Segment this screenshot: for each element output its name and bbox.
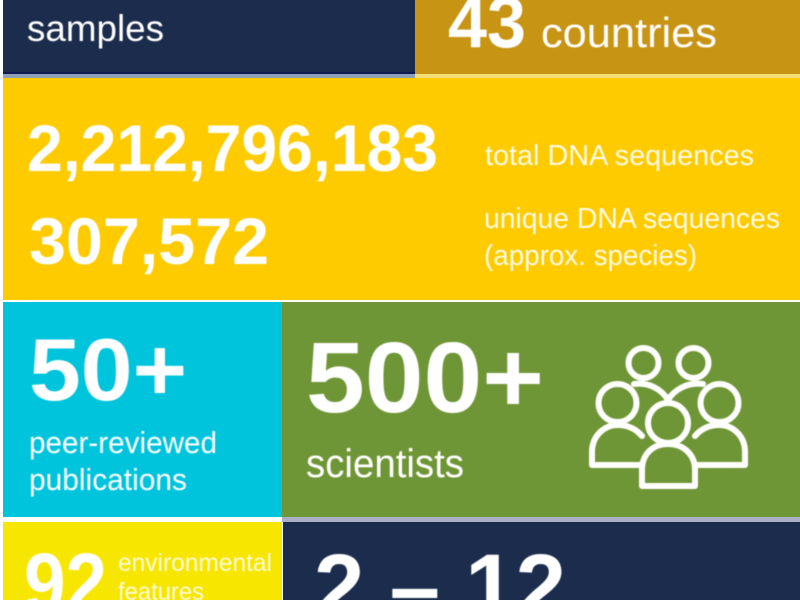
panel: publications <box>3 302 282 517</box>
samples label: samples <box>27 8 164 49</box>
unique sequences label: unique DNA sequences <box>484 203 780 235</box>
publications label: publications <box>29 462 187 497</box>
publications label: peer-reviewed <box>29 425 217 460</box>
total sequences label: total DNA sequences <box>485 140 754 172</box>
panel: range <box>283 522 800 600</box>
icon: group of people <box>592 348 745 486</box>
total sequences number: 2,212,796,183 <box>27 111 438 185</box>
panel: DNA sequences <box>3 78 800 300</box>
panel: scientists <box>282 302 800 517</box>
countries label: countries <box>541 9 717 56</box>
unique sequences number: 307,572 <box>29 204 269 278</box>
panel: samples <box>3 0 415 74</box>
panel: countries <box>415 0 800 74</box>
scientists label: scientists <box>306 442 464 486</box>
scientists number: 500+ <box>306 322 544 434</box>
panel: environmental features <box>3 522 282 600</box>
unique sequences label: (approx. species) <box>484 240 697 272</box>
features label: environmental <box>118 549 272 577</box>
publications number: 50+ <box>29 320 187 419</box>
